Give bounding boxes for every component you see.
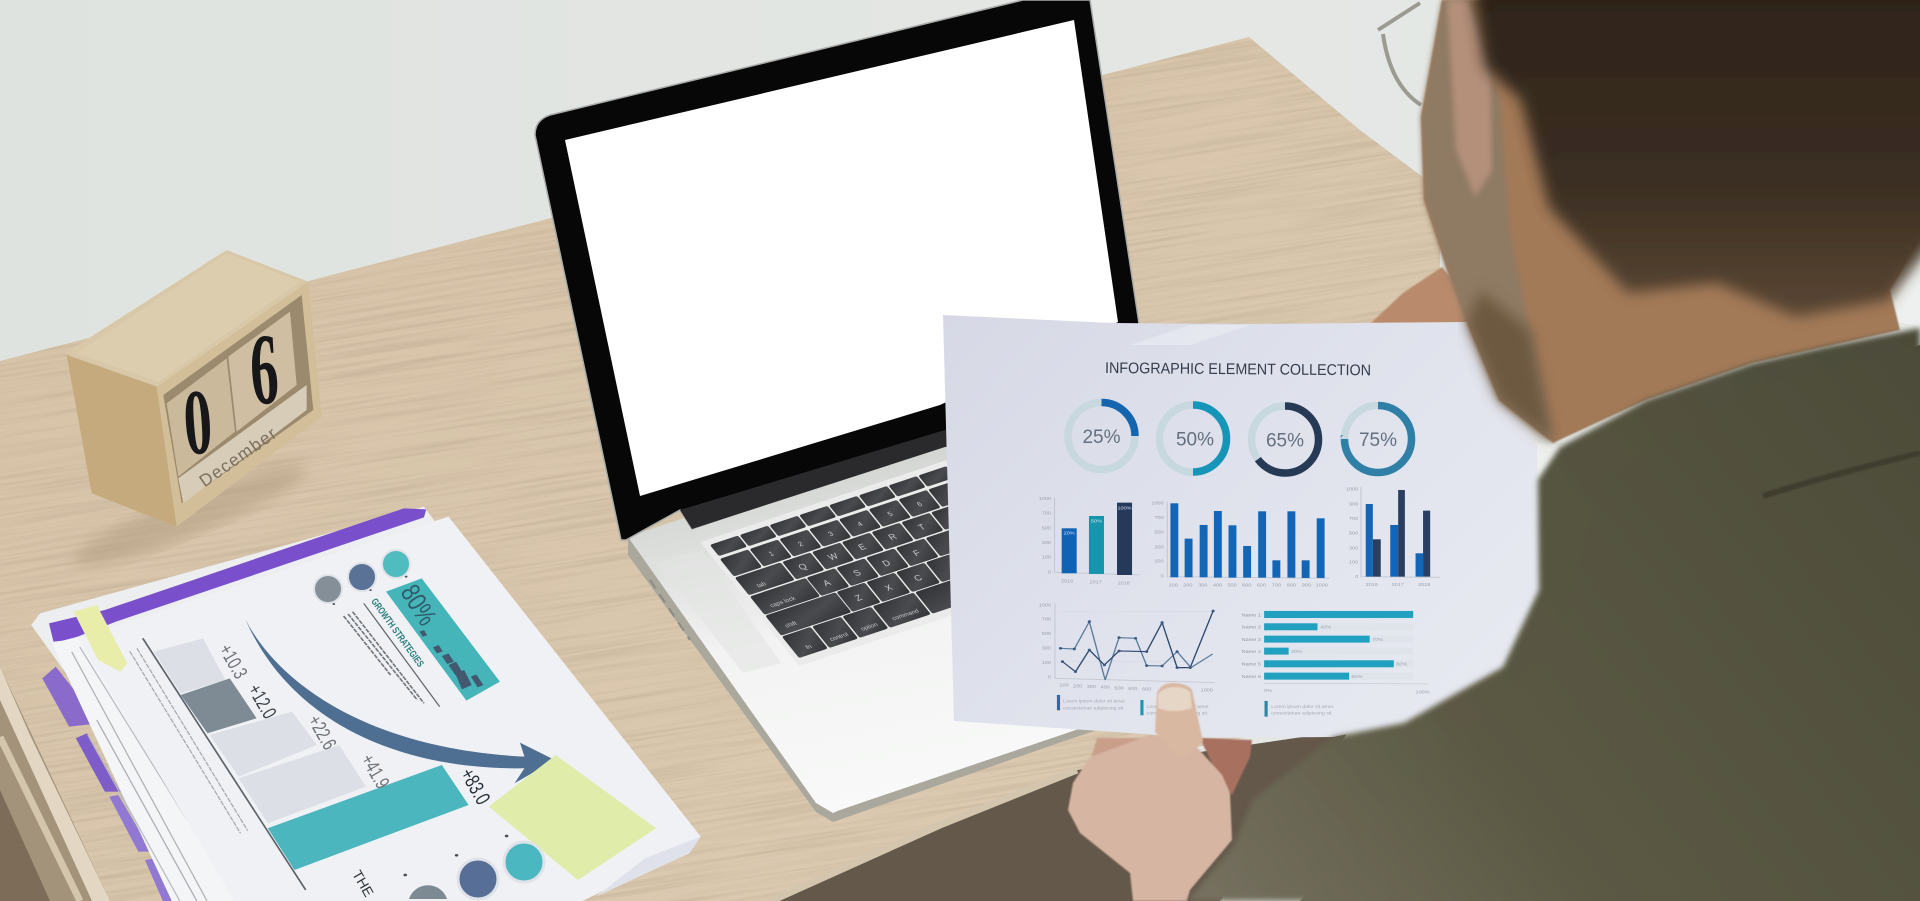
- bottom letter row: X: [883, 583, 895, 593]
- donut 25%: 25%: [1082, 427, 1121, 448]
- number row: 3: [827, 530, 835, 538]
- line chart: 300: [1087, 684, 1096, 690]
- bar 1: [154, 638, 225, 693]
- chart 2: monthly bars: 600: [1257, 583, 1266, 588]
- purple tab 1: [42, 667, 100, 727]
- chart 1: three bars: 2017: [1090, 580, 1102, 585]
- purple tab 4: [145, 858, 176, 901]
- chart 2: monthly bars: 900: [1302, 583, 1311, 588]
- bar 2: [181, 678, 257, 733]
- donut 65%: [1252, 406, 1318, 473]
- calendar digit 6: 6: [247, 312, 281, 426]
- circle badge lower grey: [409, 885, 447, 899]
- chart 3: paired bars: 2018: [1418, 582, 1431, 588]
- jaw shadow: [1467, 290, 1553, 443]
- home row: F: [911, 548, 923, 558]
- chart 3: paired bars: 900: [1349, 502, 1358, 507]
- right fingers: [1200, 738, 1252, 795]
- keyboard: [700, 435, 1121, 666]
- horizontal bar chart: 40%: [1320, 625, 1332, 630]
- line chart: 1000: [1201, 688, 1213, 693]
- legend 2: Lorem ipsum dolor sit amet: [1147, 704, 1209, 710]
- desk: [0, 37, 1440, 901]
- chart 1: three bars: 50%: [1091, 519, 1102, 524]
- page edges: [52, 637, 234, 901]
- qwerty row: Q: [796, 562, 809, 572]
- horizontal bar chart: 60%: [1351, 674, 1363, 680]
- base skin: [1421, 0, 1920, 443]
- bottom letter row: C: [912, 573, 925, 583]
- chart 2: monthly bars: 300: [1198, 583, 1208, 588]
- circle badge grey: [314, 575, 342, 603]
- chart 2: monthly bars: 0: [1161, 574, 1164, 579]
- cheek: [1421, 0, 1553, 443]
- number row: 1: [767, 550, 776, 558]
- legend 2: [1140, 700, 1209, 716]
- chart 1: three bars: 100: [1042, 555, 1051, 560]
- donut 75%: 75%: [1359, 430, 1397, 451]
- home row: caps lock: [769, 595, 798, 609]
- label +10.3: +10.3: [214, 641, 251, 683]
- circle badge lower teal: [504, 842, 544, 882]
- horizontal bar chart: 100%: [1416, 690, 1430, 695]
- chart 1: three bars: 500: [1042, 526, 1051, 531]
- bar chart axis: [143, 638, 306, 890]
- function row: [710, 456, 985, 556]
- sheet title: INFOGRAPHIC ELEMENT COLLECTION: [1105, 360, 1371, 379]
- chart 2: monthly bars: 700: [1272, 583, 1281, 588]
- home row: D: [880, 558, 893, 568]
- under-desk shadow: [771, 730, 1350, 901]
- curved arrow: [245, 619, 555, 783]
- horizontal bar chart: Name 3: [1242, 637, 1261, 643]
- wooden calendar: [65, 250, 322, 527]
- line chart: 600: [1142, 687, 1151, 692]
- bottom letter row: [765, 543, 1000, 636]
- legend 1: consectetuer adipiscing sit.: [1063, 706, 1125, 711]
- legend 1: Lorem ipsum dolor sit amet: [1063, 699, 1126, 704]
- top white page: [78, 517, 701, 901]
- thumbnail: [1158, 687, 1192, 711]
- growth text lines: [344, 612, 424, 703]
- ear: [1447, 0, 1492, 197]
- laptop lid bezel: [535, 0, 1140, 540]
- chart 2: monthly bars: [1151, 501, 1329, 588]
- chart 2: monthly bars: 500: [1154, 530, 1164, 535]
- hair: [1471, 0, 1920, 317]
- person head: [1421, 0, 1920, 443]
- laptop ports: [650, 580, 690, 640]
- jacket: [1187, 328, 1920, 901]
- bar 3: [210, 712, 317, 777]
- chart 3: paired bars: 0: [1355, 574, 1358, 580]
- qwerty row: T: [916, 522, 928, 532]
- purple tab 3: [109, 795, 152, 852]
- modifier row: option: [859, 622, 880, 632]
- palm rest panel: [657, 550, 781, 673]
- label +83.0: +83.0: [455, 764, 494, 809]
- label +41.9: +41.9: [356, 751, 393, 793]
- bottom letter row: shift: [784, 620, 799, 629]
- line chart: 600: [1128, 686, 1138, 692]
- line chart: 0: [1048, 675, 1051, 680]
- laptop base edge: [628, 350, 1250, 822]
- chart 2: monthly bars: 500: [1227, 583, 1237, 588]
- laptop base top: [628, 380, 1250, 813]
- chart 1: three bars: 0: [1048, 570, 1051, 575]
- qwerty row: E: [856, 542, 868, 552]
- bottom letter row: Z: [853, 593, 865, 603]
- chart 3: paired bars: 100: [1349, 560, 1358, 565]
- circle badge lower blue: [458, 859, 498, 899]
- horizontal bar chart: Name 1: [1242, 613, 1261, 618]
- caption lines: [130, 648, 248, 833]
- legend 3: Lorem ipsum dolor sit amet: [1271, 704, 1334, 710]
- chart 1: three bars: 20%: [1064, 531, 1075, 536]
- number row: 2: [796, 540, 805, 548]
- near hand holding the sheet: [1068, 683, 1252, 901]
- legend 1: [1057, 695, 1126, 711]
- chart 1: three bars: 1000: [1039, 496, 1051, 502]
- circle badge blue: [348, 563, 376, 591]
- chart 2: monthly bars: 100: [1154, 559, 1164, 564]
- donut 50%: [1160, 405, 1226, 472]
- chart 2: monthly bars: 600: [1242, 583, 1251, 588]
- donut 50%: 50%: [1176, 430, 1214, 450]
- legend 2: consectetuer adipiscing sit.: [1147, 711, 1208, 716]
- wall gap beside chin: [1530, 443, 1566, 486]
- line chart: 100: [1042, 660, 1051, 666]
- donut 65%: 65%: [1266, 430, 1304, 452]
- chart 2: monthly bars: 400: [1213, 583, 1222, 588]
- rear sheets: [31, 507, 681, 901]
- desk leg and front edge: [0, 667, 110, 901]
- growth rule: [364, 603, 440, 707]
- qwerty row: R: [886, 532, 899, 542]
- horizontal bar chart: 0%: [1264, 688, 1273, 694]
- horizontal bar chart: 70%: [1372, 637, 1384, 643]
- line chart: 200: [1073, 684, 1082, 689]
- home row: [750, 519, 998, 615]
- laptop hinge: [680, 360, 1140, 529]
- thumb: [1155, 683, 1203, 760]
- bar 4: [239, 745, 366, 823]
- line chart: 300: [1042, 646, 1051, 651]
- horizontal bar chart: 80%: [1396, 662, 1408, 667]
- chart 2: monthly bars: 700: [1154, 515, 1164, 521]
- qwerty row: tab: [755, 581, 768, 589]
- chart 3: paired bars: [1346, 487, 1440, 588]
- teal stat card: [386, 578, 500, 701]
- paper stack: [31, 507, 701, 901]
- wall sliver at right of neck: [1895, 260, 1920, 327]
- horizontal bar chart: 20%: [1291, 649, 1303, 655]
- qwerty row: [735, 493, 1003, 595]
- line chart: 400: [1101, 685, 1110, 690]
- sticky note: [489, 755, 656, 880]
- calendar shadow: [67, 450, 313, 580]
- home row: A: [821, 578, 834, 588]
- line chart: [1039, 603, 1215, 693]
- donut 75%: [1344, 406, 1412, 472]
- chart 2: monthly bars: 100: [1169, 583, 1178, 588]
- chart 3: paired bars: 700: [1349, 516, 1358, 522]
- laptop screen: [565, 20, 1118, 496]
- chart 2: monthly bars: 1000: [1316, 583, 1328, 588]
- legend 3: consectetuer adipiscing sit.: [1271, 711, 1333, 716]
- circle badge teal: [382, 550, 410, 578]
- horizontal bar chart: Name 6: [1242, 674, 1261, 680]
- donut 25%: [1068, 402, 1135, 470]
- chart 3: paired bars: 2016: [1366, 582, 1378, 588]
- laptop: [535, 0, 1250, 822]
- chart 2: monthly bars: 300: [1154, 545, 1164, 550]
- card mini bars: [420, 630, 483, 689]
- line chart: 500: [1114, 686, 1124, 691]
- horizontal bar chart: [1242, 611, 1430, 695]
- line chart: 500: [1042, 631, 1051, 637]
- chart 1: three bars: 2018: [1118, 581, 1130, 586]
- chart 1: three bars: 700: [1042, 511, 1051, 516]
- growth heading: GROWTH STRATEGIES: [368, 597, 426, 670]
- calendar digit 0: 0: [180, 369, 215, 475]
- line chart: 1000: [1039, 603, 1051, 608]
- home row: S: [851, 568, 863, 578]
- number row: 5: [886, 510, 895, 518]
- modifier row: [782, 550, 1059, 658]
- bar 5: [268, 765, 469, 870]
- modifier row: control: [828, 632, 850, 643]
- horizontal bar chart: Name 2: [1242, 625, 1261, 630]
- label +12.0: +12.0: [243, 681, 280, 723]
- chart 3: paired bars: 1000: [1346, 487, 1358, 492]
- label 80%: 80%: [395, 579, 442, 631]
- small sticky tab: [74, 605, 127, 672]
- far hand: [1371, 267, 1470, 323]
- purple tab 2: [76, 733, 120, 792]
- number row: 4: [856, 521, 865, 528]
- label +22.6: +22.6: [303, 712, 340, 754]
- chart 1: three bars: 100%: [1117, 506, 1132, 511]
- line chart: 700: [1042, 617, 1051, 622]
- chart 2: monthly bars: 200: [1183, 583, 1193, 588]
- calendar month: December: [195, 423, 281, 491]
- left finger: [1090, 738, 1145, 762]
- legend 3: [1265, 701, 1334, 717]
- number row: 6: [915, 501, 924, 508]
- number row: [720, 470, 1000, 576]
- modifier row: command: [891, 608, 921, 622]
- modifier row: fn: [804, 644, 814, 651]
- chart 2: monthly bars: 1000: [1151, 501, 1164, 506]
- chart 1: three bars: 2016: [1061, 579, 1074, 584]
- small dots: [332, 576, 508, 876]
- chart 3: paired bars: 2017: [1392, 582, 1404, 588]
- glasses: [1378, 3, 1421, 105]
- horizontal bar chart: Name 5: [1242, 662, 1261, 667]
- chart 3: paired bars: 300: [1349, 546, 1358, 551]
- held infographic sheet: [943, 315, 1539, 738]
- horizontal bar chart: Name 4: [1242, 649, 1261, 655]
- chart 1: three bars: [1039, 496, 1140, 586]
- lower heading: THE: [349, 867, 377, 899]
- chart 1: three bars: 300: [1042, 540, 1051, 546]
- palm: [1068, 735, 1232, 901]
- chart 3: paired bars: 500: [1349, 531, 1358, 536]
- chart 2: monthly bars: 800: [1287, 583, 1296, 588]
- purple band: [49, 508, 426, 642]
- qwerty row: W: [826, 551, 841, 562]
- line chart: 100: [1059, 683, 1069, 688]
- charts on sheet: [1039, 487, 1440, 717]
